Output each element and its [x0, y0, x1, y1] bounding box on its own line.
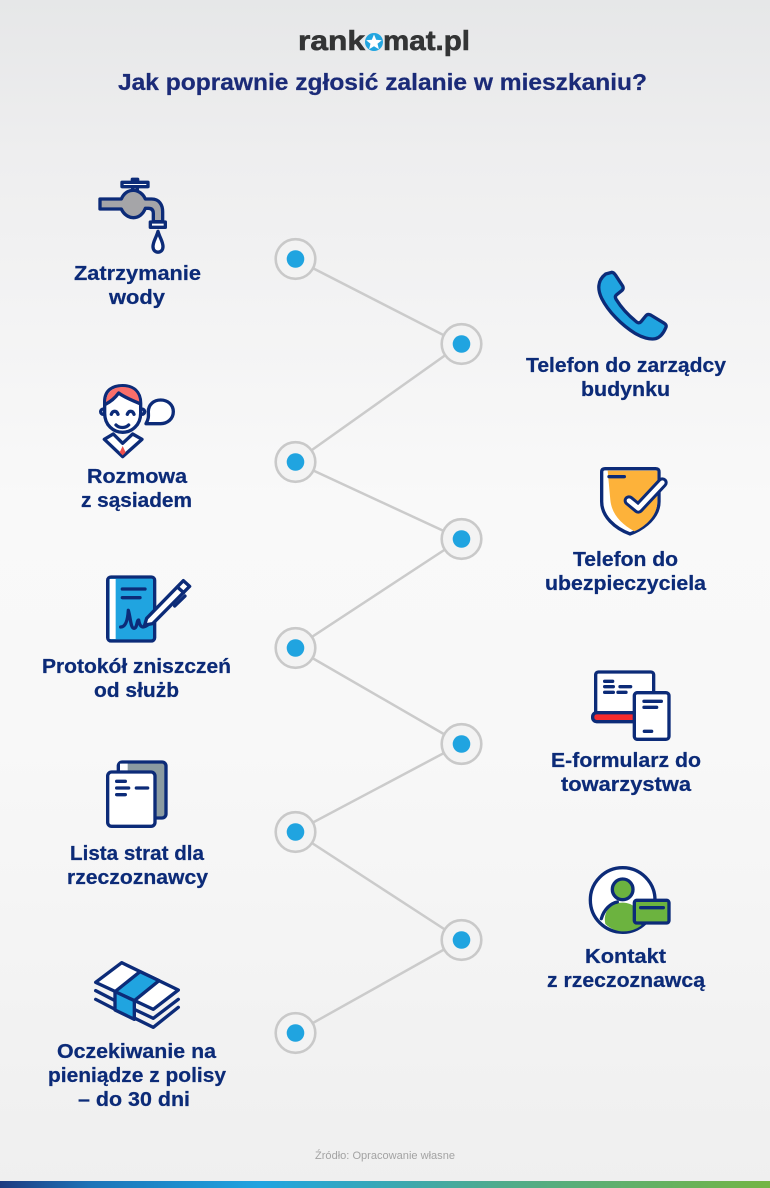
- icon: neighbour with speech bubble: [101, 386, 173, 457]
- label: Kontakt z rzeczoznawcą: [547, 945, 706, 992]
- label: Protokół zniszczeń od służb: [42, 655, 231, 702]
- label: Lista strat dla rzeczoznawcy: rzeczoznawcy: [67, 866, 209, 889]
- source note: Źródło: Opracowanie własne: [315, 1149, 455, 1162]
- icon: telephone: [599, 272, 666, 339]
- label: Oczekiwanie na pieniądze z polisy do 30 dni: Oczekiwanie na: [57, 1040, 217, 1063]
- label: Kontakt z rzeczoznawcą: Kontakt: [585, 945, 666, 968]
- label: Protokół zniszczeń od służb: od służb: [94, 679, 179, 702]
- label: Telefon do zarządcy budynku: budynku: [581, 378, 670, 401]
- icon: documents: [108, 762, 166, 826]
- label: Protokół zniszczeń od służb: Protokół zniszczeń: [42, 655, 231, 678]
- label: Telefon do zarządcy budynku: [526, 354, 727, 401]
- label: Oczekiwanie na pieniądze z polisy do 30 dni: pieniądze z polisy: [48, 1064, 227, 1087]
- label: Telefon do zarządcy budynku: Telefon do zarządcy: [526, 354, 727, 377]
- label: Oczekiwanie na pieniądze z polisy do 30 dni: [48, 1040, 227, 1111]
- label: E-formularz do towarzystwa: E-formularz do: [551, 749, 701, 772]
- label: Telefon do ubezpieczyciela: [545, 548, 707, 595]
- icon: laptop and tablet: [593, 672, 669, 739]
- label: Rozmowa z sąsiadem: [81, 465, 192, 512]
- timeline nodes: [276, 239, 481, 1053]
- bottom gradient bar: [0, 1181, 770, 1188]
- label: Rozmowa z sąsiadem: z sąsiadem: [81, 489, 192, 512]
- label: Kontakt z rzeczoznawcą: z rzeczoznawcą: [547, 969, 706, 992]
- icon: shield with check: [602, 469, 662, 534]
- icon: appraiser with card: [590, 868, 669, 932]
- logo: rankomat.pl: [298, 25, 470, 56]
- label: E-formularz do towarzystwa: towarzystwa: [561, 773, 692, 796]
- logo: rankomat.pl: mat.pl: [383, 25, 470, 56]
- label: Zatrzymanie wody: Zatrzymanie: [74, 262, 201, 285]
- label: Zatrzymanie wody: [74, 262, 201, 309]
- label: Telefon do ubezpieczyciela: Telefon do: [573, 548, 678, 571]
- label: Zatrzymanie wody: wody: [108, 286, 166, 309]
- label: Oczekiwanie na pieniądze z polisy do 30 dni: – do 30 dni: [78, 1088, 190, 1111]
- icon: banknotes stack: [96, 963, 178, 1027]
- label: Lista strat dla rzeczoznawcy: [67, 842, 209, 889]
- timeline connector: [295, 259, 461, 1033]
- logo: rankomat.pl: rank: [298, 25, 365, 56]
- label: Telefon do ubezpieczyciela: ubezpieczyciela: [545, 572, 707, 595]
- label: E-formularz do towarzystwa: [551, 749, 701, 796]
- icon: faucet: [100, 179, 165, 252]
- title: Jak poprawnie zgłosić zalanie w mieszkaniu?: [118, 69, 647, 95]
- label: Lista strat dla rzeczoznawcy: Lista strat dla: [70, 842, 205, 865]
- label: Rozmowa z sąsiadem: Rozmowa: [87, 465, 188, 488]
- icon: signed protocol and pen: [108, 577, 190, 641]
